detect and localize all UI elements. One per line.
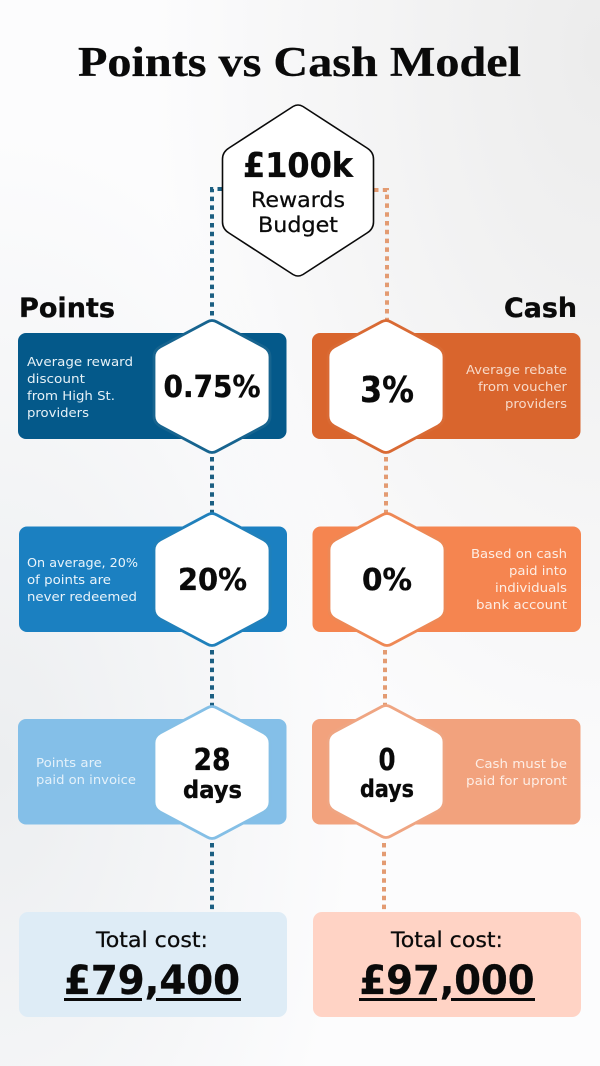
panel: points discount: from High St. xyxy=(27,389,115,403)
panel: cash total cost: £97,000 xyxy=(360,958,534,1004)
panel: cash total cost: Total cost: xyxy=(390,928,503,952)
panel: points payment timing: paid on invoice xyxy=(36,773,136,787)
panel: cash payment timing: days xyxy=(360,775,414,803)
panel: cash payment timing: Cash must be xyxy=(475,757,567,771)
budget hexagon xyxy=(222,105,374,276)
panel: cash total cost xyxy=(313,912,581,1017)
panel: cash rebate xyxy=(312,320,580,452)
panel: points payment timing xyxy=(18,706,286,838)
panel: cash breakage: paid into xyxy=(509,564,567,578)
panel: cash payment timing xyxy=(312,706,580,838)
panel: cash payment timing: paid for upront xyxy=(466,774,567,788)
connector: right dotted line xyxy=(374,190,387,911)
heading: Cash: Cash xyxy=(504,293,577,324)
panel: points total cost: £79,400 xyxy=(64,958,240,1004)
panel: points discount: Average reward xyxy=(27,355,133,369)
panel: points total cost: Total cost: xyxy=(95,928,208,952)
panel: points unredeemed: of points are xyxy=(27,573,111,587)
budget hexagon: Budget xyxy=(258,213,338,237)
panel: points payment timing: days xyxy=(183,776,242,804)
panel: points discount: discount xyxy=(27,372,85,386)
panel: cash payment timing: 0 xyxy=(378,743,396,778)
panel: cash rebate: from voucher xyxy=(478,380,567,394)
panel: points discount xyxy=(18,320,286,452)
panel: points unredeemed xyxy=(19,514,287,646)
budget hexagon: Rewards xyxy=(251,188,345,212)
budget hexagon: £100k xyxy=(243,146,354,186)
connector: left dotted line xyxy=(212,189,222,911)
panel: cash breakage: Based on cash xyxy=(471,547,567,561)
panel: points payment timing: 28 xyxy=(194,743,230,778)
panel: cash rebate: providers xyxy=(505,397,567,411)
title: Points vs Cash Model xyxy=(78,40,521,86)
panel: cash breakage: 0% xyxy=(362,563,412,598)
panel: cash breakage: bank account xyxy=(476,598,567,612)
panel: cash rebate: 3% xyxy=(360,370,414,411)
heading: Points: Points xyxy=(19,293,115,324)
panel: cash rebate: Average rebate xyxy=(466,363,567,377)
panel: points payment timing: Points are xyxy=(36,756,102,770)
panel: points discount: 0.75% xyxy=(164,370,260,405)
panel: cash breakage: individuals xyxy=(495,581,567,595)
panel: points discount: providers xyxy=(27,406,89,420)
panel: points unredeemed: never redeemed xyxy=(27,590,137,604)
panel: points total cost xyxy=(19,912,287,1017)
panel: points unredeemed: 20% xyxy=(178,563,247,598)
panel: points unredeemed: On average, 20% xyxy=(27,556,138,570)
panel: cash breakage xyxy=(312,514,581,646)
